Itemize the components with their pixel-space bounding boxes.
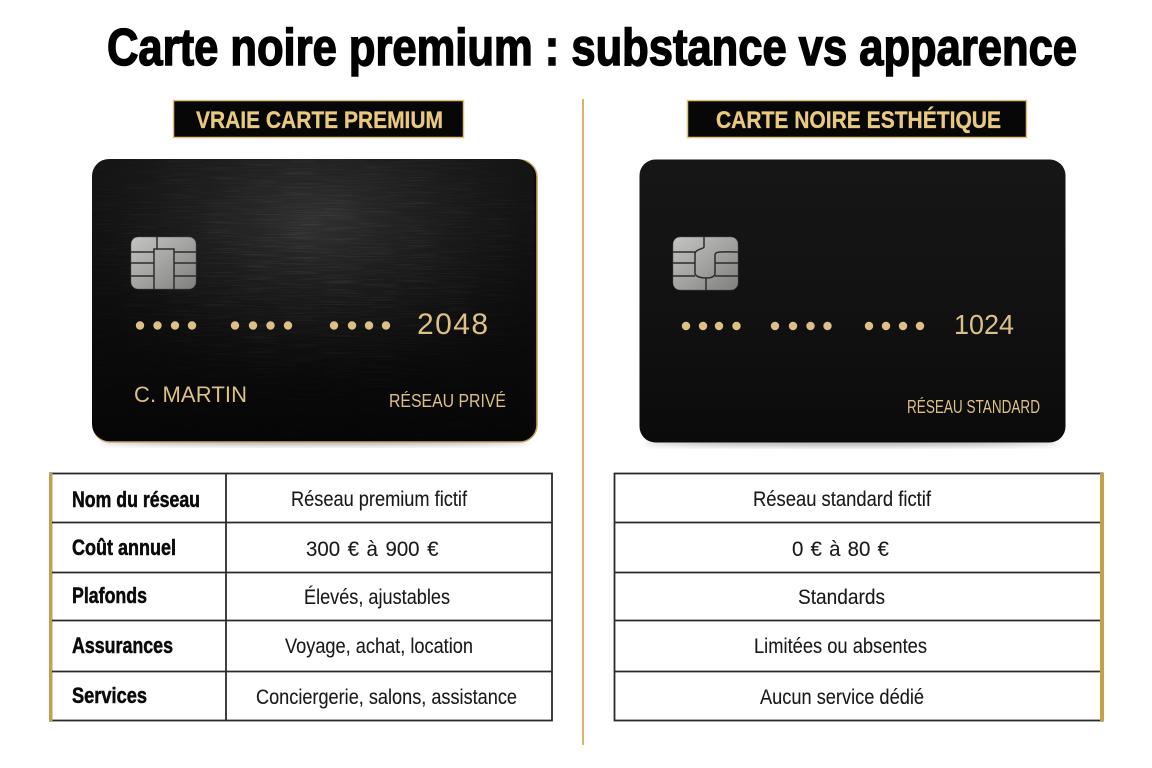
right column heading: CARTE NOIRE ESTHÉTIQUE xyxy=(716,106,1001,134)
row: plafonds: Élevés, ajustables xyxy=(304,584,450,609)
row: nom du réseau xyxy=(72,487,467,512)
aesthetic card xyxy=(640,160,1066,446)
row: services: Services xyxy=(72,683,147,708)
icon: chip xyxy=(131,237,196,289)
premium card xyxy=(92,159,537,445)
cardholder name: C. MARTIN xyxy=(134,382,247,407)
row: nom du réseau: Nom du réseau xyxy=(72,487,200,512)
center divider xyxy=(582,99,584,745)
row: plafonds xyxy=(72,583,450,609)
row: assurances: Voyage, achat, location xyxy=(285,634,473,658)
row: services: Conciergerie, salons, assistance xyxy=(256,685,517,709)
network label: RÉSEAU STANDARD xyxy=(907,396,1040,417)
row: plafonds: Plafonds xyxy=(72,583,147,608)
row: services xyxy=(72,683,517,709)
card number: 1024 xyxy=(954,309,1014,340)
right column heading xyxy=(688,100,1026,138)
right comparison table xyxy=(614,473,1104,721)
card number: 2048 xyxy=(417,308,488,341)
row: services: Aucun service dédié xyxy=(760,685,924,709)
row: coût annuel: Coût annuel xyxy=(72,535,176,560)
row: assurances: Limitées ou absentes xyxy=(754,634,927,658)
row: plafonds: Standards xyxy=(798,585,885,609)
row: coût annuel: 300 € à 900 € xyxy=(306,538,439,561)
row: nom du réseau: Réseau premium fictif xyxy=(291,487,467,511)
row: coût: 0 € à 80 € xyxy=(792,538,889,561)
row: assurances xyxy=(72,633,473,658)
card number dots xyxy=(136,321,390,330)
left column heading: VRAIE CARTE PREMIUM xyxy=(196,107,443,134)
left column heading xyxy=(174,100,464,138)
row: coût annuel xyxy=(72,535,439,561)
card number dots xyxy=(682,322,924,330)
network label: RÉSEAU PRIVÉ xyxy=(389,390,506,411)
row: assurances: Assurances xyxy=(72,633,173,658)
icon: chip xyxy=(673,237,738,290)
left comparison table xyxy=(49,473,552,721)
row: réseau: Réseau standard fictif xyxy=(753,487,931,511)
